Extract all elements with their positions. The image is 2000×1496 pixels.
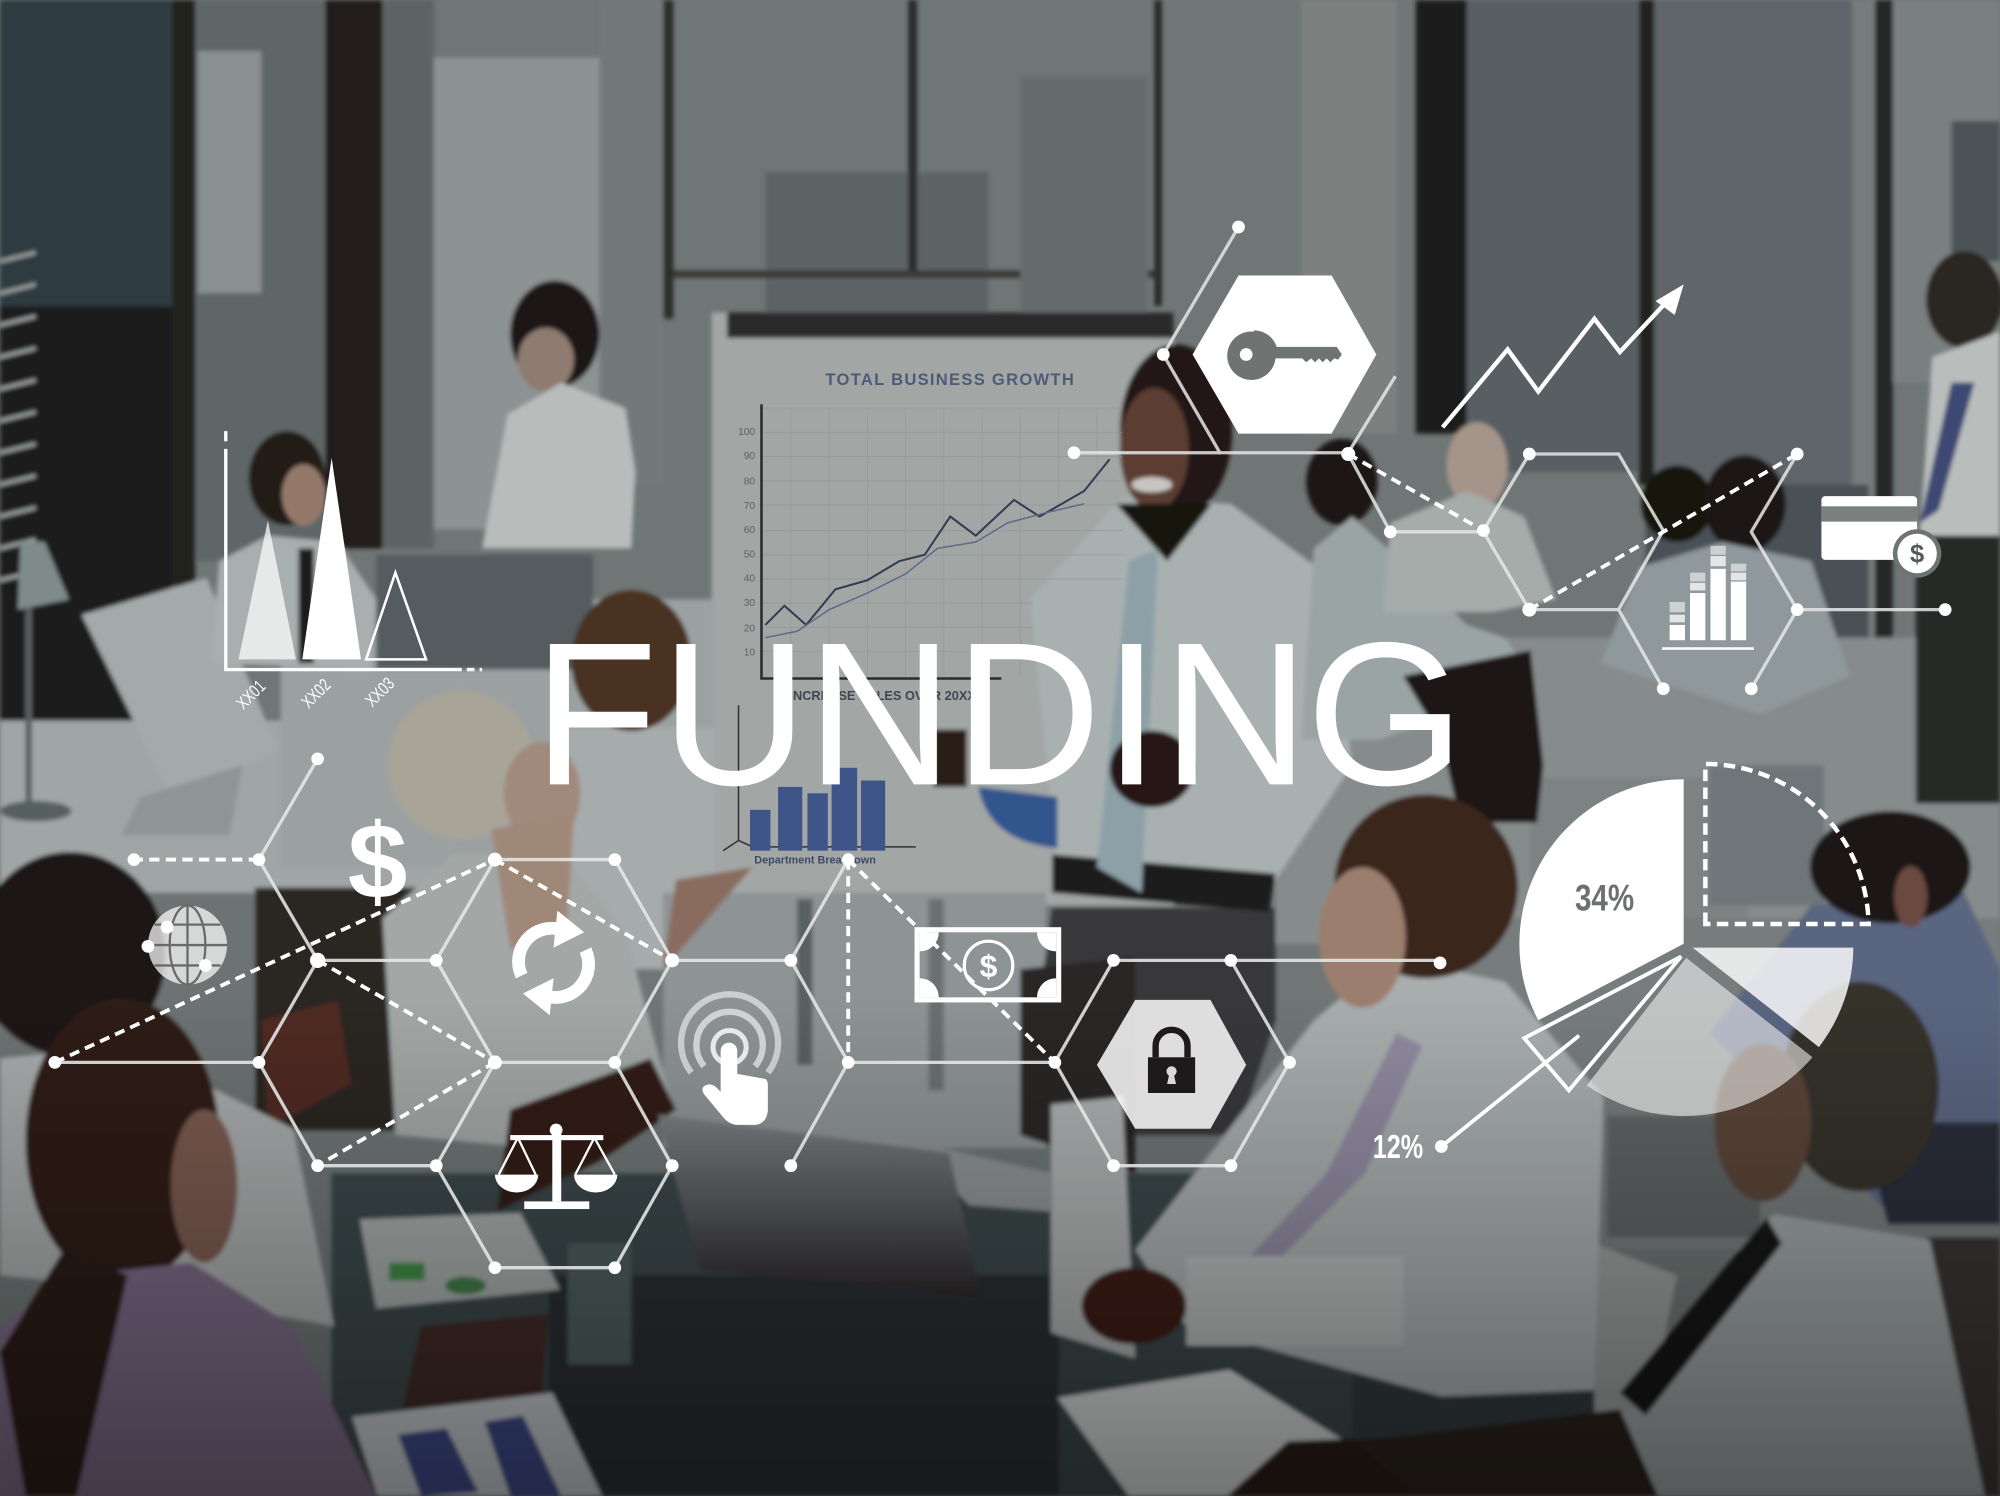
triangle chart: XX02 [298, 676, 335, 712]
icon: balance scale [495, 1124, 617, 1209]
icon: globe [142, 906, 227, 985]
board chart: total business growth: 80 [744, 477, 755, 488]
icon: touch finger [681, 994, 778, 1125]
area behind the presenter [663, 893, 1046, 1148]
board chart: total business growth: Department Breakdown [754, 854, 876, 866]
board chart: total business growth: 90 [744, 451, 755, 462]
brown-haired man [1135, 957, 1603, 1397]
icon: credit card with coin [1821, 496, 1941, 578]
icon: dollar sign: $ [348, 801, 407, 921]
laptop and papers [903, 1139, 1052, 1212]
triangle chart: XX01 [233, 677, 270, 714]
hexagon network top right [1068, 221, 1952, 695]
icon: trend arrow [1443, 284, 1684, 427]
icon: sync arrows [519, 911, 589, 1015]
triangle chart [226, 431, 482, 714]
standing man far right [1926, 251, 2000, 348]
standing presenter [1020, 908, 1276, 1135]
left desks [0, 721, 446, 893]
board chart: total business growth: 70 [744, 501, 755, 512]
lower table [332, 1173, 1352, 1496]
standing man in the back [510, 281, 599, 388]
board chart: total business growth: 30 [744, 598, 755, 609]
man in blue shirt [1709, 893, 2000, 1224]
board chart: total business growth: 50 [744, 549, 755, 560]
pie chart: 34% [1575, 879, 1634, 919]
board chart: total business growth: 100 [738, 427, 755, 438]
board chart: total business growth: TOTAL BUSINESS GROWTH [825, 370, 1075, 389]
board chart: total business growth: INCREASE SALES OVER 20XX [789, 688, 976, 703]
whiteboard [712, 312, 1173, 906]
icon: credit card with coin: $ [1910, 540, 1924, 568]
woman front left [0, 852, 166, 1056]
icon: key in hexagon [1193, 275, 1376, 434]
seated group top right [1306, 439, 1378, 525]
hexagon network lock [1048, 954, 1446, 1172]
white-haired woman [383, 854, 673, 1154]
board chart: total business growth [723, 370, 1122, 866]
icon: padlock in hexagon [1097, 1000, 1246, 1129]
triangle chart: XX03 [362, 674, 399, 711]
pie chart: 12% [1373, 1129, 1423, 1166]
icon: banknote: $ [980, 948, 998, 984]
pie chart [1373, 764, 1869, 1166]
board chart: total business growth: 10 [744, 648, 755, 659]
board chart: total business growth: 40 [744, 574, 755, 585]
hexagon network left [48, 752, 1055, 1274]
title: FUNDING [533, 600, 1465, 828]
board chart: total business growth: 20 [744, 623, 755, 634]
icon: bar chart [1662, 546, 1754, 650]
overlay: bottom darkening [0, 995, 2000, 1496]
seated man back left [249, 431, 325, 525]
icon: banknote [917, 930, 1059, 1000]
grey-haired man front right [1478, 1214, 1985, 1496]
board chart: total business growth: 60 [744, 525, 755, 536]
